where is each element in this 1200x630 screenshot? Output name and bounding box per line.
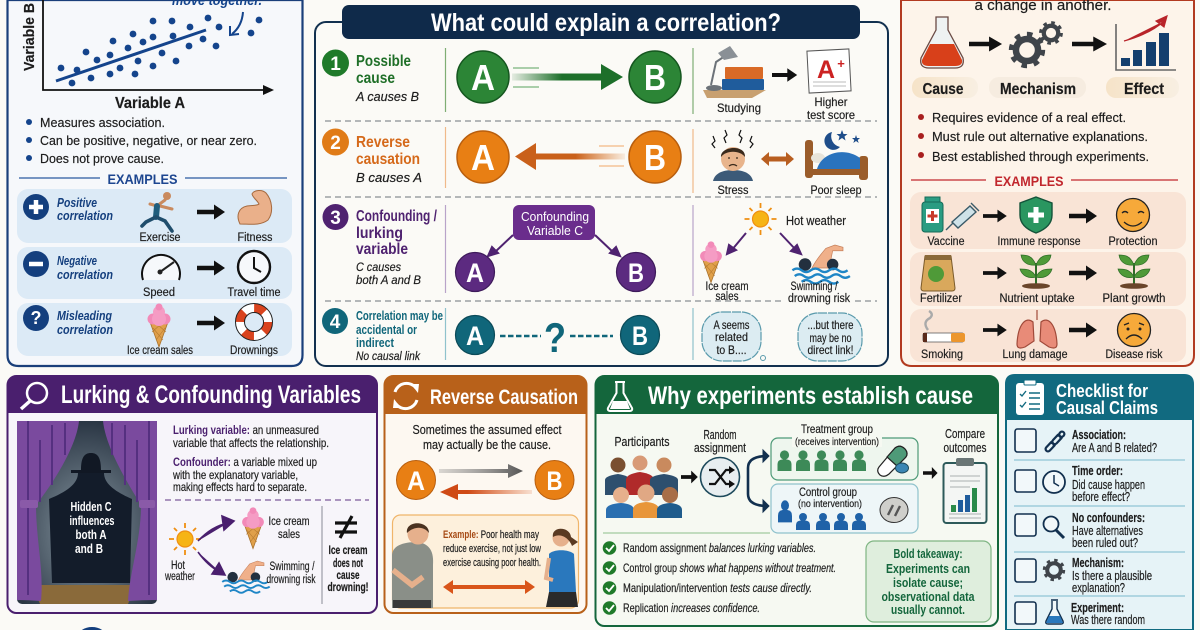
- text: intro: may actually be the cause.: [423, 437, 551, 452]
- row 2: reverse causation: 2: [330, 133, 341, 154]
- example: positive correlation: correlation: [57, 209, 113, 223]
- group: compare outcomes: outcomes: [944, 441, 986, 455]
- callout: bold takeaway: Experiments can: [886, 561, 970, 576]
- illustration: hidden figure on a stage: [17, 421, 157, 604]
- header: Causal Claims: [1056, 398, 1158, 418]
- row 2: reverse causation: Reverse: [356, 134, 410, 151]
- diagram: hot weather example: drowning!: [328, 582, 368, 594]
- row 1: possible cause: Higher: [814, 95, 848, 109]
- icon: cropped badge at bottom edge: [82, 627, 102, 630]
- item: time order: Did cause happen: [1072, 478, 1145, 492]
- row 1: possible cause: A causes B: [355, 89, 419, 104]
- example: vaccine chain: Protection: [1108, 236, 1158, 248]
- example: fertilizer chain: Plant growth: [1102, 293, 1166, 305]
- row 3: confounding variable: Swimming /: [790, 281, 838, 293]
- example: misleading correlation: Misleading: [57, 309, 112, 323]
- icon: books and lamp: [703, 46, 766, 98]
- example: negative correlation: Negative: [57, 254, 97, 268]
- row 2: reverse causation: [322, 127, 868, 197]
- item: no confounders: [1015, 511, 1145, 550]
- group: random assignment: Random: [704, 428, 736, 442]
- item: time order: [1015, 464, 1145, 504]
- text: definitions: making effects hard to separate.: [173, 480, 307, 494]
- row 4: accidental or indirect: accidental or: [356, 322, 417, 337]
- title: What could explain a correlation?: [431, 9, 781, 37]
- item: no confounders: Have alternatives: [1072, 524, 1143, 538]
- callout: A seems related: to B....: [716, 343, 746, 357]
- example: positive correlation: [17, 189, 292, 244]
- header: Why experiments establish cause: [648, 382, 973, 410]
- group: random assignment: [694, 428, 746, 496]
- row 3: confounding variable: C causes: [356, 260, 401, 274]
- diagram: hot weather example: [164, 506, 368, 604]
- box: control group: (no intervention): [798, 498, 862, 510]
- checklist: experiment benefits: Control group shows what happens without treatment.: [623, 561, 836, 575]
- callout: but there may be no direct link: [798, 313, 862, 361]
- box: control group: [771, 484, 918, 533]
- diagram: cause mechanism effect: Effect: [1124, 81, 1165, 98]
- bullet list: causation facts: Best established through experiments.: [932, 149, 1149, 164]
- item: no confounders: been ruled out?: [1072, 536, 1138, 550]
- row 1: possible cause: cause: [356, 70, 395, 87]
- group: random assignment: assignment: [694, 441, 746, 455]
- example: misleading correlation: ?: [30, 308, 42, 328]
- header: Checklist for: [1056, 381, 1148, 401]
- scatter plot: Variable A: [115, 95, 185, 112]
- illustration: hidden figure on a stage: Hidden C: [70, 500, 112, 514]
- callout: but there may be no direct link: ...but there: [808, 318, 854, 332]
- diagram: hot weather example: Swimming /: [270, 561, 315, 573]
- figure: unwell man: [392, 523, 433, 608]
- item: experiment: [1015, 600, 1145, 627]
- title: [342, 5, 860, 39]
- callout: A seems related: A seems: [714, 318, 750, 332]
- row 3: confounding variable: Confounding: [521, 210, 589, 224]
- heading: examples: EXAMPLES: [108, 171, 178, 187]
- panel: checklist for causal claims: [1006, 375, 1193, 630]
- row 3: confounding variable: [322, 203, 853, 305]
- arrow: split to groups: [748, 450, 769, 512]
- header: [384, 376, 586, 414]
- illustration: hidden figure on a stage: influences: [70, 514, 115, 528]
- callout: but there may be no direct link: may be no: [810, 331, 852, 345]
- heading: examples: EXAMPLES: [994, 173, 1064, 189]
- icon: graded paper: +: [837, 56, 845, 71]
- illustration: hidden figure on a stage: and B: [75, 542, 103, 556]
- example: negative correlation: Speed: [143, 287, 175, 299]
- header: [596, 376, 998, 414]
- bullet list: correlation facts: Does not prove cause.: [40, 151, 164, 166]
- group: compare outcomes: [944, 427, 986, 523]
- example: positive correlation: Exercise: [140, 232, 180, 244]
- bullet list: causation facts: Requires evidence of a real effect.: [932, 110, 1126, 125]
- row 1: possible cause: Studying: [717, 101, 761, 115]
- callout: example: reduce exercise, not just low: [443, 543, 541, 555]
- example: misleading correlation: Drownings: [230, 345, 278, 357]
- panel: correlation: [8, 0, 302, 366]
- item: mechanism: explanation?: [1072, 581, 1125, 595]
- item: association: Are A and B related?: [1072, 441, 1157, 455]
- row 3: confounding variable: A: [466, 258, 484, 288]
- row 1: possible cause: Possible: [356, 53, 411, 70]
- diagram: hot weather example: sales: [278, 529, 300, 541]
- row 2: reverse causation: Stress: [718, 183, 748, 197]
- text: definitions: Confounder: a variable mixed up: [173, 455, 317, 469]
- example: misleading correlation: [17, 303, 292, 357]
- row 3: confounding variable: variable: [356, 241, 408, 258]
- diagram: hot weather example: Hot: [171, 560, 186, 572]
- group: compare outcomes: Compare: [945, 427, 985, 441]
- diagram: cause mechanism effect: Cause: [922, 81, 964, 98]
- row 4: accidental or indirect: B: [632, 321, 648, 351]
- bullet list: causation facts: [918, 110, 1149, 164]
- diagram: hot weather example: weather: [164, 571, 195, 583]
- text: intro: Sometimes the assumed effect: [412, 422, 562, 437]
- example: fertilizer chain: Fertilizer: [920, 293, 962, 305]
- row 4: accidental or indirect: [322, 308, 862, 363]
- row 1: possible cause: A: [471, 57, 495, 98]
- item: mechanism: Is there a plausible: [1072, 569, 1152, 583]
- checklist: experiment benefits: [603, 541, 836, 615]
- item: time order: before effect?: [1072, 490, 1130, 504]
- text: definitions: with the explanatory variable,: [172, 468, 298, 482]
- row dividers: [325, 121, 877, 301]
- checklist: experiment benefits: Replication increases confidence.: [623, 601, 760, 615]
- box: treatment group: (receives intervention): [795, 436, 879, 448]
- example: vaccine chain: Immune response: [998, 236, 1080, 248]
- example: smoking chain: Lung damage: [1002, 349, 1068, 361]
- example: smoking chain: Smoking: [921, 349, 963, 361]
- scatter plot: Variable B: [21, 3, 38, 71]
- item: time order: Time order:: [1072, 464, 1123, 478]
- row 4: accidental or indirect: No causal link: [356, 349, 421, 363]
- callout: A seems related: related: [715, 330, 748, 344]
- row 2: reverse causation: B: [644, 137, 666, 178]
- callout: bold takeaway: [866, 541, 991, 622]
- callout: A seems related: [702, 312, 766, 361]
- bullet list: causation facts: Must rule out alternative explanations.: [932, 129, 1148, 144]
- row 3: confounding variable: both A and B: [356, 273, 421, 287]
- diagram: cause mechanism effect: Mechanism: [1000, 81, 1076, 98]
- diagram: hot weather example: drowning risk: [266, 574, 316, 586]
- diagram: hot weather example: does not: [333, 558, 363, 570]
- diagram: A and B arrows: [396, 460, 574, 500]
- group: participants: Participants: [614, 435, 670, 449]
- diagram: cause mechanism effect: [912, 16, 1179, 98]
- header: [1006, 375, 1193, 420]
- diagram: hot weather example: Ice cream: [328, 545, 368, 557]
- text: definitions: variable that affects the relationship.: [173, 436, 329, 450]
- item: association: Association:: [1072, 428, 1126, 442]
- row 1: possible cause: 1: [330, 54, 341, 75]
- row 3: confounding variable: B: [628, 258, 644, 288]
- item: experiment: Experiment:: [1071, 601, 1124, 615]
- callout: example: exercise causing poor health.: [443, 557, 541, 569]
- row 3: confounding variable: Confounding /: [356, 208, 438, 225]
- example: misleading correlation: correlation: [57, 323, 113, 337]
- panel: why experiments establish cause: [596, 376, 998, 626]
- checklist: experiment benefits: Manipulation/intervention tests cause directly.: [623, 581, 812, 595]
- bullet list: correlation facts: [26, 115, 257, 166]
- example: misleading correlation: Ice cream sales: [127, 345, 193, 357]
- row 2: reverse causation: B causes A: [356, 170, 422, 185]
- figure: runner: [546, 529, 578, 607]
- row 4: accidental or indirect: ?: [544, 314, 566, 361]
- example: positive correlation: Fitness: [238, 232, 273, 244]
- row 3: confounding variable: Variable C: [527, 224, 583, 238]
- text: intro: [412, 422, 562, 452]
- header: [8, 376, 377, 413]
- item: no confounders: No confounders:: [1072, 511, 1145, 525]
- box: treatment group: [771, 424, 918, 480]
- callout: bold takeaway: Bold takeaway:: [894, 547, 962, 561]
- row 2: reverse causation: Poor sleep: [810, 183, 862, 197]
- row 1: possible cause: B: [644, 57, 666, 98]
- panel: what could explain a correlation: [315, 5, 888, 366]
- box: treatment group: Treatment group: [801, 424, 873, 436]
- example: negative correlation: correlation: [57, 268, 113, 282]
- example: negative correlation: Travel time: [228, 287, 280, 299]
- row 4: accidental or indirect: 4: [330, 312, 341, 333]
- icon: graded paper: [807, 49, 851, 93]
- diagram: A and B arrows: B: [546, 466, 562, 496]
- row 2: reverse causation: A: [471, 137, 495, 178]
- panel: lurking and confounding variables: [8, 376, 377, 613]
- row 4: accidental or indirect: Correlation may be: [356, 308, 443, 323]
- row 1: possible cause: test score: [807, 108, 855, 122]
- callout: bold takeaway: observational data: [882, 589, 975, 604]
- header: Lurking & Confounding Variables: [61, 381, 361, 409]
- row 3: confounding variable: drowning risk: [788, 293, 850, 305]
- icon: stressed person: [712, 130, 753, 181]
- row 4: accidental or indirect: indirect: [356, 335, 395, 350]
- callout: bold takeaway: usually cannot.: [891, 602, 965, 617]
- item: experiment: Was there random: [1071, 613, 1145, 627]
- group: participants: [605, 435, 682, 518]
- bullet list: correlation facts: Can be positive, negative, or near zero.: [40, 133, 257, 148]
- example: vaccine chain: Vaccine: [928, 236, 964, 248]
- text: definitions: [172, 423, 329, 494]
- text: definitions: Lurking variable: an unmeasured: [173, 423, 319, 437]
- example: fertilizer chain: [910, 252, 1186, 306]
- example: fertilizer chain: Nutrient uptake: [1000, 293, 1074, 305]
- callout: example: [392, 515, 578, 608]
- icon: graded paper: A: [817, 56, 835, 84]
- bullet list: correlation facts: Measures association.: [40, 115, 165, 130]
- row 3: confounding variable: sales: [716, 291, 739, 303]
- panel: reverse causation: [384, 376, 586, 613]
- callout: example: Example: Poor health may: [443, 529, 539, 541]
- box: control group: Control group: [799, 487, 857, 499]
- row 4: accidental or indirect: A: [466, 321, 484, 351]
- row 3: confounding variable: 3: [330, 208, 341, 229]
- example: smoking chain: [910, 309, 1186, 362]
- item: association: [1015, 428, 1157, 455]
- item: mechanism: [1015, 556, 1152, 595]
- illustration: hidden figure on a stage: both A: [76, 528, 106, 542]
- callout: but there may be no direct link: direct link!: [808, 343, 854, 357]
- example: positive correlation: Positive: [57, 196, 97, 210]
- row 2: reverse causation: causation: [356, 151, 420, 168]
- scatter plot: [21, 0, 274, 112]
- header: Reverse Causation: [430, 386, 578, 409]
- example: smoking chain: Disease risk: [1106, 349, 1163, 361]
- row 3: confounding variable: Ice cream: [706, 281, 748, 293]
- example: negative correlation: [17, 247, 292, 299]
- diagram: hot weather example: cause: [336, 570, 360, 582]
- row 1: possible cause: [322, 46, 855, 122]
- diagram: A and B arrows: A: [407, 466, 425, 496]
- item: mechanism: Mechanism:: [1072, 556, 1124, 570]
- diagram: hot weather example: Ice cream: [268, 516, 310, 528]
- example: vaccine chain: [910, 192, 1186, 249]
- panel: causation: [901, 0, 1194, 366]
- row 3: confounding variable: Hot weather: [786, 214, 846, 228]
- row 3: confounding variable: lurking: [356, 225, 403, 242]
- callout: bold takeaway: isolate cause;: [893, 575, 963, 590]
- icon: bed with moon: [805, 130, 868, 180]
- checklist: experiment benefits: Random assignment balances lurking variables.: [623, 541, 816, 555]
